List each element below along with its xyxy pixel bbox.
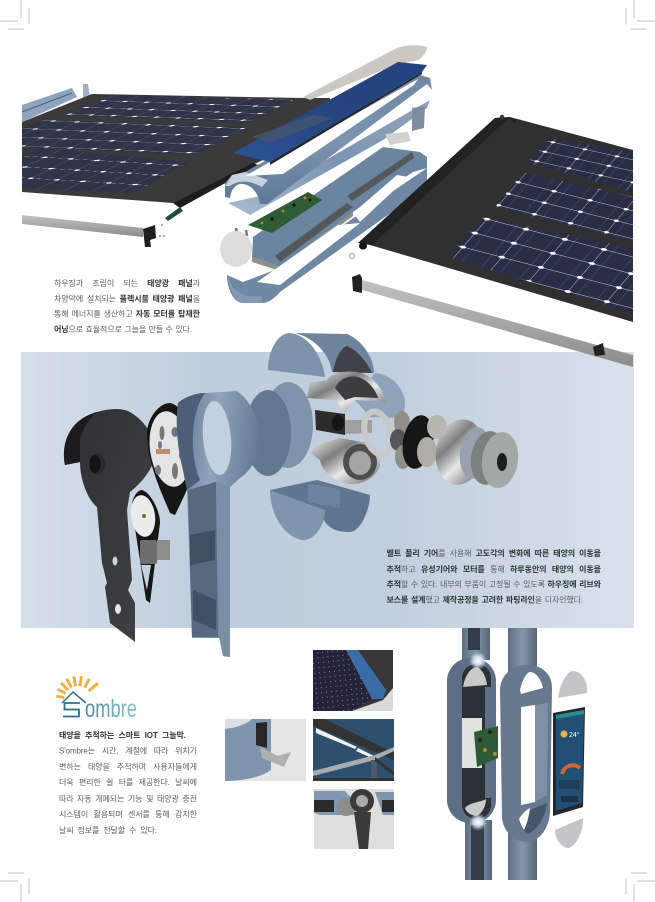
- bottom half dome: [270, 480, 370, 540]
- top cover: [303, 45, 427, 100]
- photo: solar panel corner: [313, 650, 393, 711]
- control display: 24°: [569, 731, 580, 739]
- tray: [252, 147, 427, 267]
- belt pulleys: [128, 403, 197, 603]
- photo: housing detail: [225, 719, 306, 781]
- logo: Sombre: ombre: [85, 695, 137, 723]
- ring gear and end cap: [431, 415, 522, 490]
- paragraph: solar panel description: [54, 278, 201, 334]
- paragraph: product summary: 태양을 추적하는 스마트 IOT 그늘막.: [59, 730, 186, 740]
- paragraph: product summary: 더욱 편리한 쉴 터를 제공한다. 날씨에: [59, 777, 197, 787]
- panel: blue background band: [21, 352, 634, 628]
- paragraph: mechanism description: 보스를 설계했고 제작공정을 고려한 파팅라인을 디자인했다.: [386, 594, 583, 604]
- right solar awning panel: [349, 115, 633, 367]
- logo: Sombre: [56, 676, 137, 723]
- paragraph: product summary: 따라 자동 개폐되는 기능 및 태양광 충전: [59, 794, 197, 804]
- paragraph: mechanism description: 추적하고 유성기어와 모터를 통해 하루동안의 태양의 이동을: [386, 564, 602, 574]
- control display: [553, 707, 585, 816]
- light plate: [228, 100, 430, 215]
- planetary gear set: [360, 408, 447, 471]
- blue ring arm: [177, 391, 260, 657]
- paragraph: mechanism description: 벨트 풀리 기어를 사용해 고도각의 변화에 따른 태양의 이동을: [386, 548, 602, 558]
- end plate disc: [236, 228, 247, 236]
- paragraph: solar panel description: 하우징과 조립이 되는 태양광 패널과: [54, 278, 201, 288]
- lower frame: [227, 168, 427, 303]
- paragraph: product summary: S'ombre는 시간, 계절에 따라 위치가: [59, 746, 198, 756]
- paragraph: product summary: [59, 730, 198, 835]
- lower silver cage: [310, 438, 380, 484]
- post with empty frame: middle assembly: [500, 628, 552, 880]
- half-moon covers: [555, 671, 587, 848]
- flexible blue solar strip: [233, 62, 427, 162]
- drum discs behind arm: [245, 382, 313, 476]
- post with control module: left assembly: [447, 628, 498, 880]
- upper arch shell: [225, 75, 432, 204]
- paragraph: solar panel description: 어닝으로 효율적으로 그늘을 만들 수 있다.: [54, 324, 192, 334]
- paragraph: mechanism description: 추적할 수 있다. 내부의 부품이 고정될 수 있도록 하우징에 리브와: [386, 579, 602, 589]
- photo: underside lights: [313, 719, 394, 781]
- bracket and block: [412, 106, 425, 131]
- left solar awning panel: [22, 84, 330, 247]
- paragraph: mechanism description: [386, 548, 602, 604]
- paragraph: product summary: 날씨 정보를 전달할 수 있다.: [59, 825, 157, 835]
- circuit board: [248, 192, 322, 233]
- paragraph: product summary: 변하는 태양을 추적하며 사용자들에게: [59, 762, 197, 772]
- exploded joint: black housing: [64, 409, 155, 642]
- back blue disc: [355, 373, 405, 418]
- upper silver cage and motor: [307, 372, 386, 435]
- exploded awning housing: [220, 45, 432, 303]
- paragraph: product summary: 시스템이 활용되며 센서를 통해 감지한: [59, 809, 198, 819]
- top half dome: [268, 333, 374, 377]
- photo: joint assembly: [314, 789, 394, 849]
- circuit board: [474, 726, 498, 767]
- paragraph: solar panel description: 차양막에 설치되는 플렉시블 태양광 패널을: [54, 294, 200, 304]
- paragraph: solar panel description: 통해 에너지를 생산하고 자동 모터를 탑재한: [54, 308, 201, 318]
